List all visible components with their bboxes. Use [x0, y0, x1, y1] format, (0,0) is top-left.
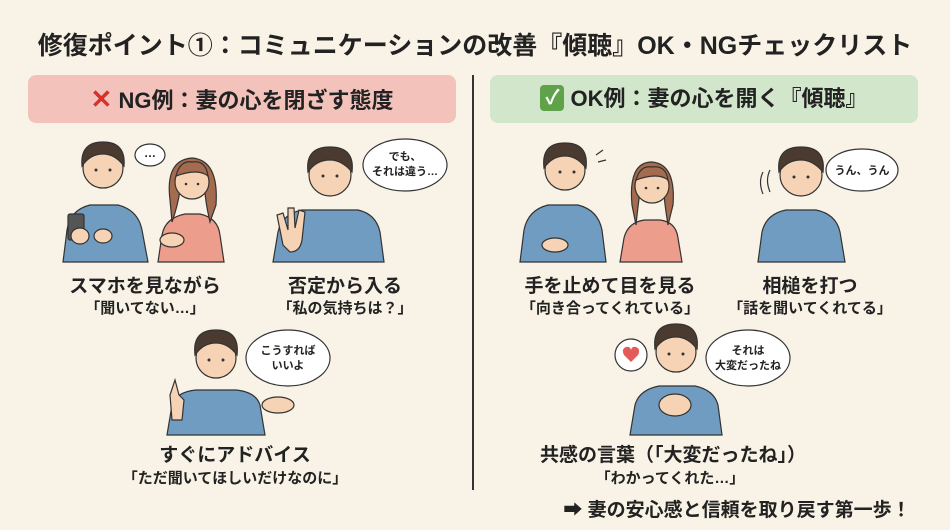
figure: empathizing man [630, 324, 722, 435]
banner: OK: ✓ [545, 87, 560, 109]
figure: advice man [167, 330, 294, 435]
label: 否定: 否定から入る [288, 276, 402, 297]
figure: man with phone and woman [63, 142, 224, 262]
sub: 聞いてない: 「聞いてない…」 [85, 300, 205, 317]
bubble: でも [363, 139, 447, 191]
banner: NG [28, 75, 456, 123]
bubble: それは大変だったね [706, 330, 790, 386]
banner: OK [490, 75, 918, 123]
bubble: でも: でも、 [389, 150, 421, 163]
banner: OK: OK例：妻の心を開く『傾聴』 [571, 86, 868, 111]
faces: eyes [94, 168, 810, 362]
label: スマホ: スマホを見ながら [69, 276, 221, 297]
figure: nodding man [758, 147, 845, 262]
figure: man stopping hand [273, 147, 384, 262]
label: 共感: 共感の言葉（「大変だったね」） [540, 445, 806, 466]
label: 相槌: 相槌を打つ [762, 276, 858, 297]
bubble: こうすれば [246, 330, 330, 386]
bubble: こうすれば: いいよ [272, 359, 304, 372]
conclusion: ➡ 妻の安心感と信頼を取り戻す第一歩！ [563, 500, 911, 521]
title: 修復ポイント①：コミュニケーションの改善『傾聴』OK・NGチェックリスト [38, 32, 912, 60]
sub: 向き合って: 「向き合ってくれている」 [521, 300, 699, 317]
bubble: でも: それは違う… [372, 164, 438, 178]
bubble: うん、うん: うん、うん [834, 164, 890, 177]
sub: ただ聞いて: 「ただ聞いてほしいだけなのに」 [123, 470, 347, 487]
label: アドバイス: すぐにアドバイス [159, 445, 311, 466]
bubble: こうすれば: こうすれば [260, 343, 316, 357]
bubble: heart [615, 339, 647, 371]
figure: OK man and woman facing [520, 143, 682, 262]
bubble: それは大変だったね: 大変だったね [715, 358, 781, 372]
bubble: dots [135, 144, 165, 166]
bubble: それは大変だったね: それは [732, 344, 764, 357]
bubble: dots: … [144, 146, 156, 160]
sub: 私の気持ち: 「私の気持ちは？」 [277, 300, 412, 317]
label: 手を止めて: 手を止めて目を見る [524, 276, 696, 297]
bubble: うん、うん [826, 149, 898, 191]
banner: NG: ✕ NG例：妻の心を閉ざす態度 [91, 84, 393, 114]
sub: 話を聞いて: 「話を聞いてくれてる」 [728, 300, 892, 317]
sub: わかってくれた: 「わかってくれた…」 [596, 470, 744, 487]
